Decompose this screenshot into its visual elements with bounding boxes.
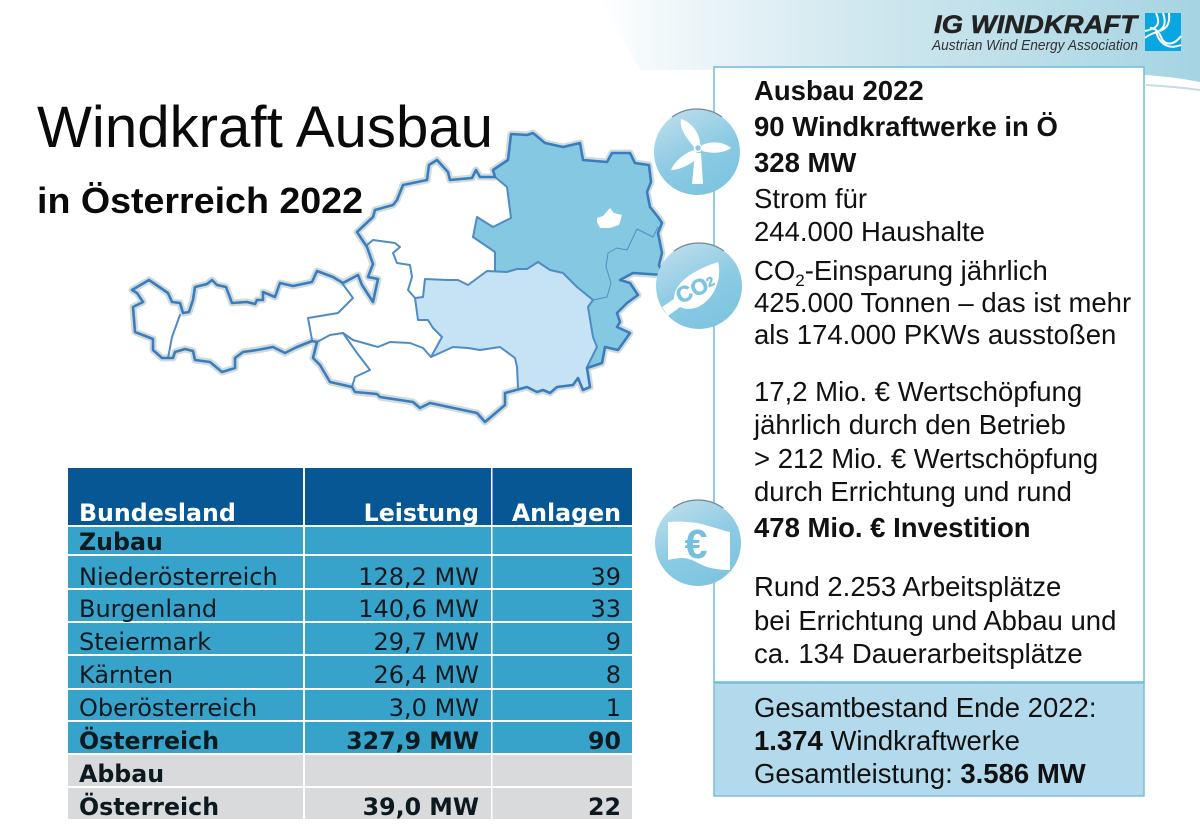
row: Österreich total: 327,9 MW: [346, 727, 479, 755]
map of Austria: [132, 133, 663, 422]
row: Oberösterreich: Oberösterreich: [79, 694, 257, 722]
row: Abbau: [68, 755, 632, 788]
row: Niederösterreich: 39: [590, 563, 621, 591]
value creation text: > 212 Mio. € Wertschöpfung: [754, 443, 1098, 474]
row: Niederösterreich: 128,2 MW: [358, 563, 479, 591]
value creation text: durch Errichtung und rund: [754, 476, 1072, 507]
heading block: Ausbau 2022: [754, 75, 924, 106]
table header: [68, 468, 632, 527]
row: Burgenland: [68, 590, 632, 623]
row: Niederösterreich: Niederösterreich: [79, 563, 278, 591]
heading block: 328 MW: [754, 147, 856, 178]
jobs text: [754, 571, 1116, 669]
row: Oberösterreich: 3,0 MW: [389, 694, 479, 722]
row: Kärnten: 26,4 MW: [373, 661, 479, 689]
icon: euro banknote: €: [685, 521, 708, 567]
value creation text: 478 Mio. € Investition: [754, 512, 1031, 543]
Niederösterreich and Burgenland: [473, 133, 663, 368]
row: Steiermark: 29,7 MW: [373, 628, 479, 656]
value creation text: [753, 376, 1098, 543]
row: Oberösterreich: [68, 690, 632, 722]
row: Österreich total: [68, 722, 632, 755]
value creation text: 17,2 Mio. € Wertschöpfung: [754, 376, 1082, 407]
table header: Anlagen: [512, 499, 621, 527]
jobs text: bei Errichtung und Abbau und: [754, 605, 1116, 636]
row: Österreich Abbau: 22: [588, 793, 621, 821]
row: Abbau: Abbau: [79, 760, 164, 788]
row: Kärnten: 8: [606, 661, 621, 689]
Burgenland border: [593, 227, 658, 300]
row: Oberösterreich: 1: [606, 694, 621, 722]
panel: Gesamtbestand: Gesamtbestand Ende 2022:: [754, 692, 1096, 723]
CO2 text: CO: [754, 255, 795, 286]
row: Zubau: [68, 527, 632, 556]
CO2 text: [754, 255, 1131, 350]
households text: [754, 183, 985, 247]
row: Österreich total: Österreich: [79, 727, 219, 755]
CO2 text: 425.000 Tonnen – das ist mehr: [754, 287, 1131, 318]
row: Kärnten: Kärnten: [79, 661, 173, 689]
table header: Bundesland: [79, 499, 236, 527]
internal state borders: [168, 177, 597, 387]
row: Steiermark: [68, 623, 632, 656]
CO2 text: -Einsparung jährlich: [805, 255, 1048, 286]
row: Österreich Abbau: 39,0 MW: [363, 793, 479, 821]
icon: CO2 leaf: CO: [672, 272, 712, 308]
row: Österreich total: 90: [588, 727, 621, 755]
jobs text: ca. 134 Dauerarbeitsplätze: [754, 638, 1083, 669]
heading block: 90 Windkraftwerke in Ö: [754, 111, 1058, 142]
row: Burgenland: 33: [590, 595, 621, 623]
panel: Gesamtbestand: [714, 683, 1144, 796]
row: Zubau: Zubau: [79, 528, 163, 556]
title: Windkraft Ausbau: [37, 95, 493, 160]
logo: IG Windkraft: [931, 11, 1181, 54]
icon: CO2 leaf: 2: [704, 273, 717, 290]
subtitle: in Österreich 2022: [37, 180, 363, 221]
heading block: [754, 75, 1058, 178]
table: Ausbau nach Bundesland: [68, 468, 632, 821]
panel: Ausbau 2022 facts: [714, 67, 1144, 682]
panel: Gesamtbestand: 1.374 Windkraftwerke: [754, 725, 1020, 756]
value creation text: jährlich durch den Betrieb: [753, 409, 1066, 440]
households text: 244.000 Haushalte: [754, 216, 985, 247]
households text: Strom für: [754, 183, 867, 214]
logo: IG Windkraft: Austrian Wind Energy Association: [931, 38, 1138, 54]
CO2 text: 2: [795, 271, 805, 290]
jobs text: Rund 2.253 Arbeitsplätze: [754, 571, 1061, 602]
row: Österreich Abbau: Österreich: [79, 793, 219, 821]
CO2 text: als 174.000 PKWs ausstoßen: [754, 319, 1116, 350]
panel: Gesamtbestand: Gesamtleistung: 3.586 MW: [754, 758, 1086, 789]
row: Burgenland: 140,6 MW: [358, 595, 479, 623]
icon: CO2 leaf: [656, 243, 742, 329]
icon: euro banknote: [655, 500, 741, 586]
row: Niederösterreich: [68, 556, 632, 591]
header background swoosh: [600, 0, 1200, 90]
row: Steiermark: Steiermark: [79, 628, 211, 656]
logo: IG Windkraft: IG WINDKRAFT: [934, 11, 1140, 39]
row: Kärnten: [68, 656, 632, 689]
outer border: [132, 133, 663, 422]
row: Burgenland: Burgenland: [79, 595, 217, 623]
Steiermark: [415, 262, 597, 393]
icon: wind turbine: [654, 109, 740, 195]
table header: Leistung: [364, 499, 479, 527]
map halo: [132, 133, 663, 422]
Wien: [597, 208, 622, 228]
row: Steiermark: 9: [606, 628, 621, 656]
row: Österreich Abbau: [68, 788, 632, 821]
